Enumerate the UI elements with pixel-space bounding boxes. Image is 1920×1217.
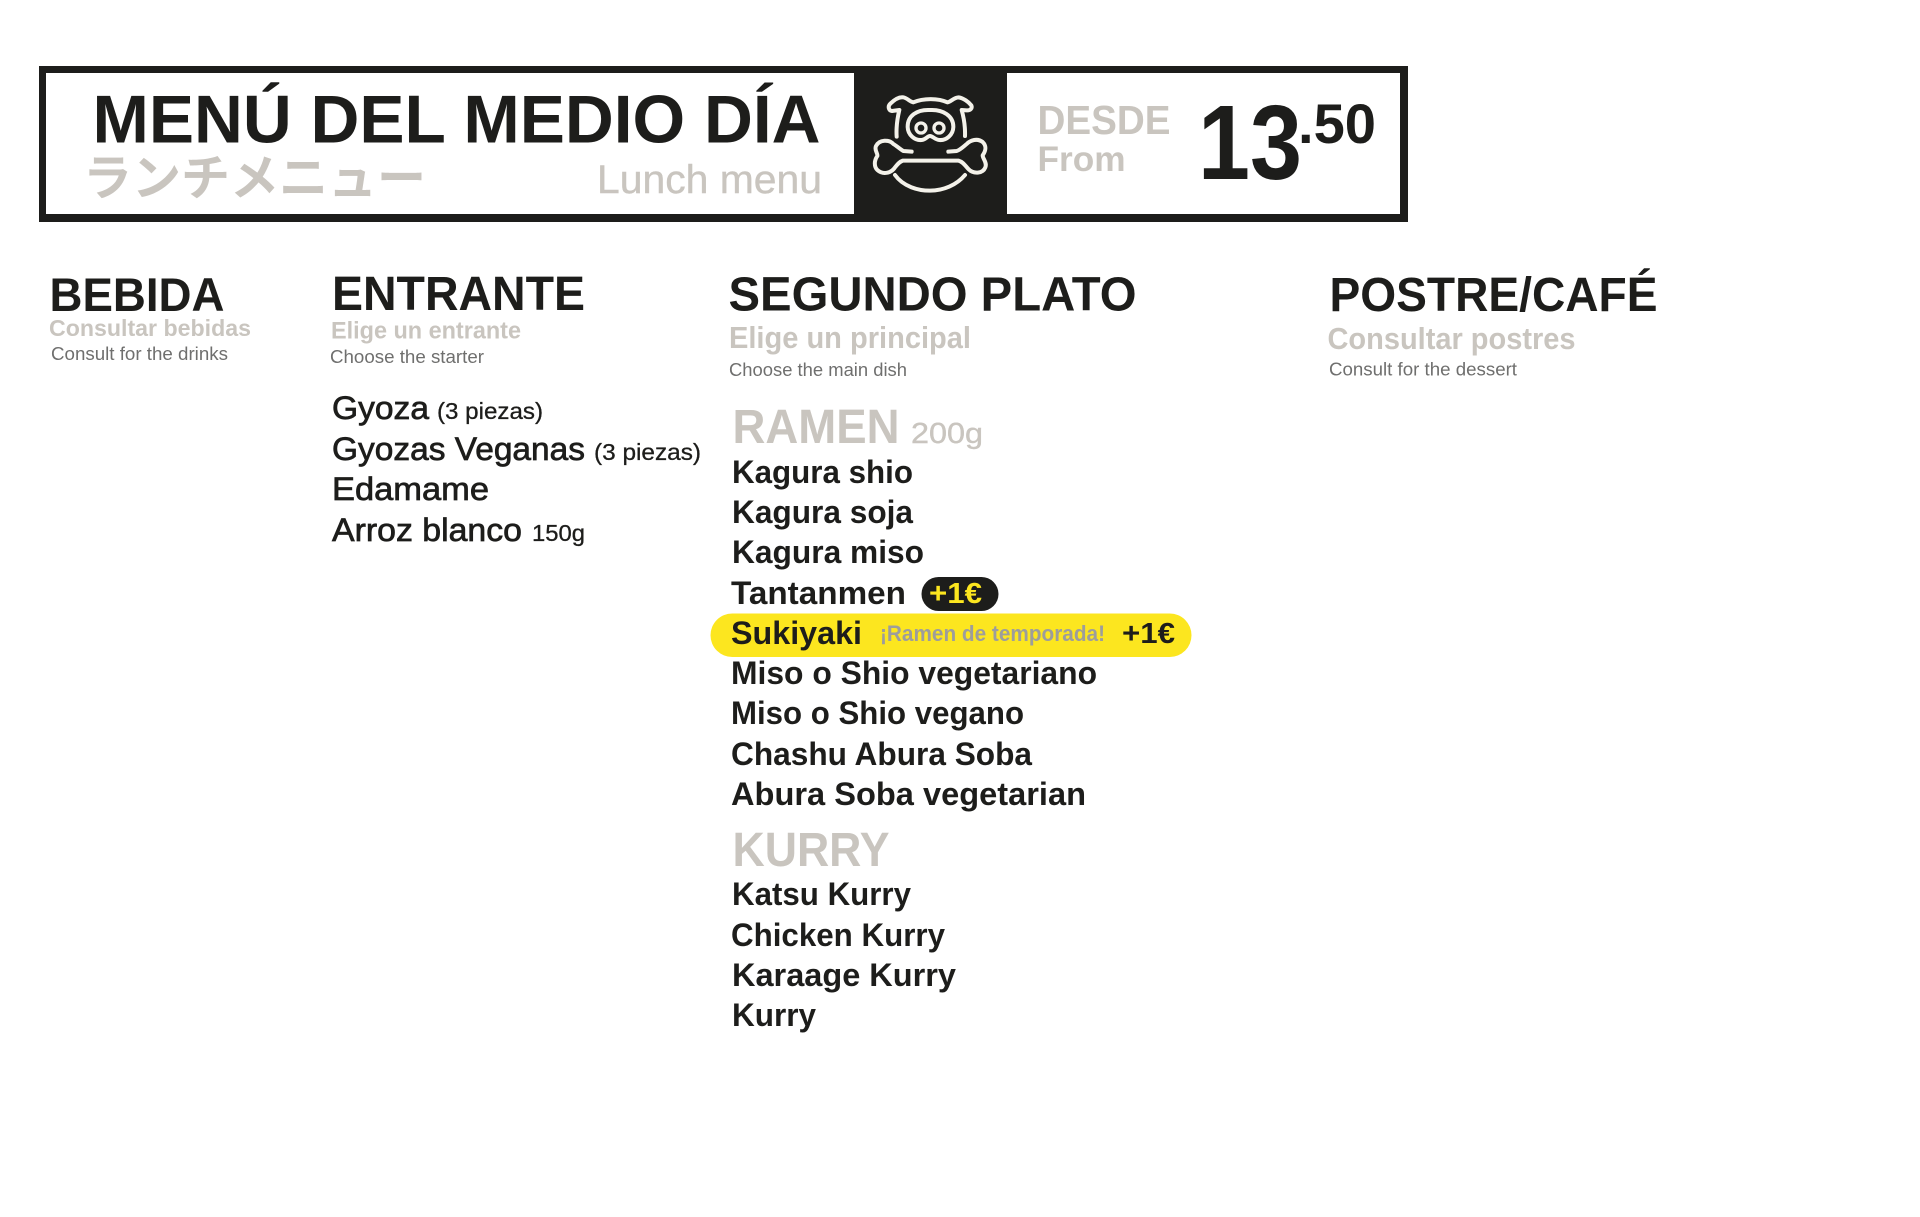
section heading: ramen: RAMEN [732, 401, 900, 454]
item: edamame: Edamame [332, 471, 489, 507]
panel: title [46, 73, 854, 214]
header banner [39, 66, 1408, 222]
item: gyozas veganas [332, 431, 701, 467]
item: gyozas veganas: (3 piezas) [594, 439, 701, 465]
panel: price [1007, 73, 1400, 214]
badge: plus one euro: +1€ [929, 578, 982, 610]
item: miso o shio vegetariano: Miso o Shio vegetariano [731, 655, 1097, 691]
highlight: sukiyaki: Sukiyaki [731, 615, 862, 651]
price label english: From [1038, 140, 1126, 179]
item: gyoza: (3 piezas) [437, 398, 543, 424]
english title: Lunch menu [597, 158, 822, 202]
column: postre y cafe [1328, 268, 1658, 380]
column: segundo plato [710, 268, 1192, 1033]
highlight: sukiyaki [710, 614, 1192, 657]
japanese title: ランチメニュー [83, 139, 426, 210]
banner frame [39, 66, 1408, 222]
highlight: sukiyaki: ¡Ramen de temporada! [880, 621, 1105, 646]
subheading english: Consult for the dessert [1329, 360, 1517, 380]
heading: BEBIDA [50, 268, 224, 321]
item: kurry: Kurry [732, 997, 816, 1033]
item: gyoza [332, 390, 543, 426]
item: miso o shio vegano: Miso o Shio vegano [731, 695, 1024, 731]
price integer: 13 [1198, 84, 1302, 202]
heading: ENTRANTE [332, 268, 585, 321]
item: tantanmen: Tantanmen [731, 575, 906, 611]
item: kagura miso: Kagura miso [732, 534, 924, 570]
item: arroz blanco: 150g [532, 520, 585, 546]
section heading: kurry: KURRY [732, 824, 890, 877]
icon: pig with bone [875, 97, 986, 191]
highlight: sukiyaki: +1€ [1122, 618, 1175, 650]
badge: plus one euro [922, 577, 998, 611]
subheading spanish: Elige un principal [729, 320, 971, 355]
item: chashu abura soba: Chashu Abura Soba [731, 736, 1032, 772]
item: gyoza: Gyoza [332, 390, 429, 426]
price label spanish: DESDE [1038, 97, 1170, 143]
subheading english: Choose the main dish [729, 360, 907, 380]
heading: SEGUNDO PLATO [728, 268, 1136, 322]
column: bebida [49, 268, 251, 364]
item: katsu kurry: Katsu Kurry [732, 876, 911, 912]
item: karaage kurry: Karaage Kurry [732, 957, 956, 993]
price decimals: .50 [1298, 92, 1376, 155]
item: kagura shio: Kagura shio [732, 454, 913, 490]
subheading spanish: Consultar bebidas [49, 315, 251, 341]
section heading: ramen: 200g [911, 418, 983, 450]
heading: POSTRE/CAFÉ [1330, 268, 1658, 322]
subheading spanish: Elige un entrante [331, 318, 521, 344]
title: MENÚ DEL MEDIO DÍA [92, 82, 820, 158]
subheading english: Choose the starter [330, 347, 484, 367]
item: abura soba vegetarian: Abura Soba vegetarian [731, 776, 1086, 812]
subheading spanish: Consultar postres [1328, 321, 1576, 356]
item: chicken kurry: Chicken Kurry [731, 917, 945, 953]
item: arroz blanco: Arroz blanco [332, 512, 522, 548]
item: gyozas veganas: Gyozas Veganas [332, 431, 585, 467]
column: entrante [330, 268, 701, 548]
subheading english: Consult for the drinks [51, 344, 228, 364]
item: kagura soja: Kagura soja [732, 494, 913, 530]
